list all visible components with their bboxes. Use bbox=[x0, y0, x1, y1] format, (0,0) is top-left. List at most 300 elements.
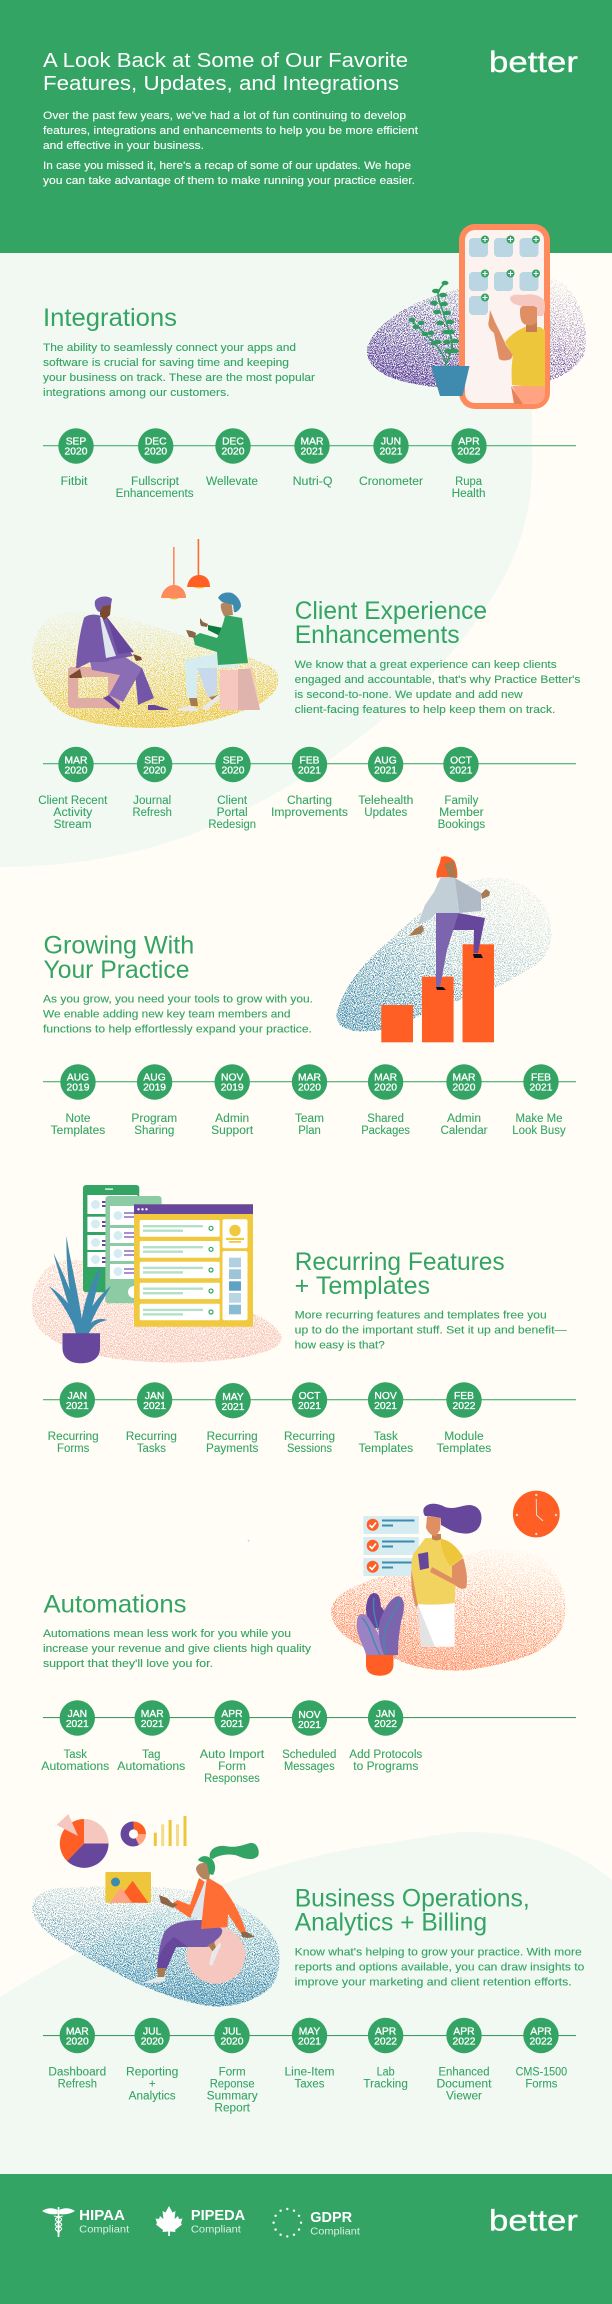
potted plant bbox=[49, 1236, 111, 1363]
body text: software is crucial for saving time and keeping bbox=[43, 357, 289, 369]
bars bbox=[381, 944, 494, 1042]
seated person right bbox=[178, 593, 260, 711]
milestone: Team Plan: Plan bbox=[298, 1125, 321, 1137]
panel: growing with your practice bbox=[43, 856, 576, 1137]
body text: support that they'll love you for. bbox=[43, 1658, 213, 1670]
milestone: Nutri-Q: Nutri-Q bbox=[293, 476, 333, 488]
pie chart bbox=[57, 1814, 109, 1868]
milestone: Client Recent Activity Stream: MAR bbox=[65, 755, 87, 766]
heading: Enhancements bbox=[295, 621, 460, 649]
milestone: Client Portal Redesign: SEP bbox=[223, 755, 243, 766]
milestone: Cronometer bbox=[359, 428, 423, 488]
illustration: app screens and plant bbox=[32, 1185, 282, 1363]
milestone: Tag Automations bbox=[117, 1700, 186, 1773]
milestone: Add Protocols to Programs: to Programs bbox=[353, 1761, 419, 1773]
milestone: Telehealth Updates: Telehealth bbox=[358, 795, 413, 807]
body text: how easy is that? bbox=[295, 1339, 385, 1351]
milestone: Recurring Tasks: 2021 bbox=[143, 1401, 166, 1412]
potted plant bbox=[357, 1593, 404, 1676]
milestone: Enhanced Document Viewer: APR bbox=[453, 2026, 475, 2037]
phone bbox=[459, 224, 550, 409]
intro text: you can take advantage of them to make running your practice easier. bbox=[43, 175, 415, 187]
milestone: Telehealth Updates: AUG bbox=[374, 755, 397, 766]
milestone: Line-Item Taxes: Taxes bbox=[294, 2078, 325, 2090]
intro text: In case you missed it, here's a recap of some of our updates. We hope bbox=[43, 160, 411, 172]
milestone: Team Plan: 2020 bbox=[298, 1083, 321, 1094]
heading: Integrations bbox=[43, 304, 177, 332]
HIPAA badge bbox=[42, 2207, 129, 2237]
milestone: Task Automations bbox=[41, 1700, 110, 1773]
icon: maple leaf bbox=[156, 2206, 182, 2236]
heading bbox=[295, 1885, 530, 1937]
milestone: Charting Improvements: Improvements bbox=[271, 807, 348, 819]
milestone: Admin Support bbox=[211, 1064, 254, 1137]
milestone: Client Portal Redesign: 2020 bbox=[222, 765, 245, 776]
milestone: Admin Support: Support bbox=[211, 1125, 254, 1137]
milestone: Lab Tracking: 2022 bbox=[374, 2036, 397, 2047]
milestone: Family Member Bookings: Family bbox=[444, 795, 479, 807]
body text: improve your marketing and client retention efforts. bbox=[295, 1977, 572, 1989]
logo: better bbox=[489, 46, 578, 79]
milestone: Wellevate: 2020 bbox=[222, 447, 245, 458]
milestone: Task Templates bbox=[358, 1382, 413, 1455]
milestone: Rupa Health: Rupa bbox=[455, 476, 483, 488]
milestone: Recurring Payments bbox=[206, 1383, 259, 1455]
heading: Client Experience bbox=[295, 597, 487, 625]
milestone: Task Templates: NOV bbox=[374, 1391, 397, 1402]
body text: up to do the important stuff. Set it up and benefit— bbox=[295, 1324, 567, 1336]
milestone: Tag Automations: MAR bbox=[141, 1709, 164, 1720]
milestone: Make Me Look Busy bbox=[512, 1064, 566, 1137]
milestone: Make Me Look Busy: FEB bbox=[531, 1073, 551, 1084]
milestone: Fullscript Enhancements: DEC bbox=[145, 437, 167, 448]
logo: better bbox=[489, 2205, 578, 2238]
milestone: Scheduled Messages: NOV bbox=[298, 1710, 321, 1721]
milestone: Form Reponse Summary Report: Report bbox=[214, 2102, 251, 2114]
milestone: Dashboard Refresh: Refresh bbox=[58, 2078, 97, 2090]
milestone: Team Plan: Team bbox=[295, 1113, 324, 1125]
milestone: Auto Import Form Responses: Responses bbox=[204, 1773, 260, 1785]
milestone: Lab Tracking: Lab bbox=[377, 2066, 395, 2078]
body text: engaged and accountable, that's why Practice Better's bbox=[295, 674, 581, 686]
milestone: Recurring Forms: 2021 bbox=[66, 1401, 89, 1412]
milestone: Cronometer: JUN bbox=[381, 437, 401, 448]
HIPAA badge: Compliant bbox=[79, 2224, 129, 2236]
milestone: Recurring Tasks bbox=[126, 1382, 177, 1455]
milestone: Journal Refresh: Journal bbox=[133, 795, 171, 807]
milestone: Client Portal Redesign: Redesign bbox=[208, 819, 256, 831]
milestone: Fitbit bbox=[58, 428, 94, 488]
intro text bbox=[43, 110, 418, 187]
milestone: Program Sharing: AUG bbox=[143, 1073, 166, 1084]
light green phone bbox=[105, 1196, 162, 1303]
heading: Analytics + Billing bbox=[295, 1909, 487, 1937]
milestone: CMS-1500 Forms: APR bbox=[530, 2026, 552, 2037]
milestone: Scheduled Messages bbox=[282, 1700, 336, 1773]
clock bbox=[513, 1491, 560, 1537]
heading: Automations bbox=[44, 1591, 186, 1619]
yellow app window bbox=[134, 1204, 253, 1327]
milestone: Wellevate bbox=[206, 428, 258, 488]
seated person left bbox=[68, 597, 168, 710]
body text: The ability to seamlessly connect your apps and bbox=[43, 342, 296, 354]
heading bbox=[295, 597, 487, 649]
title: A Look Back at Some of Our Favorite bbox=[43, 50, 408, 72]
stippled purple blob bbox=[367, 275, 586, 389]
milestone: Recurring Sessions: OCT bbox=[299, 1391, 321, 1402]
milestone: Make Me Look Busy: 2021 bbox=[530, 1083, 553, 1094]
milestone: Rupa Health: 2022 bbox=[458, 447, 481, 458]
body text: increase your revenue and give clients high quality bbox=[43, 1643, 312, 1655]
body text bbox=[295, 1309, 567, 1351]
milestone: Client Portal Redesign bbox=[208, 747, 256, 831]
milestone: Form Reponse Summary Report: JUL bbox=[223, 2026, 241, 2037]
milestone: Line-Item Taxes bbox=[284, 2018, 334, 2090]
milestone: Family Member Bookings bbox=[438, 747, 485, 831]
milestone: Reporting + Analytics bbox=[126, 2018, 178, 2102]
milestone: Family Member Bookings: 2021 bbox=[450, 765, 473, 776]
icon: ring of stars bbox=[272, 2208, 302, 2238]
milestone: Recurring Payments: MAY bbox=[222, 1392, 244, 1403]
milestone: Task Automations: Task bbox=[64, 1749, 87, 1761]
milestone: Cronometer: 2021 bbox=[380, 447, 403, 458]
milestone: Reporting + Analytics: + bbox=[149, 2078, 156, 2090]
milestone: Nutri-Q bbox=[293, 428, 333, 488]
PIPEDA badge: Compliant bbox=[191, 2224, 241, 2236]
milestone: Charting Improvements: Charting bbox=[287, 795, 332, 807]
milestone: Admin Calendar: Calendar bbox=[440, 1125, 488, 1137]
milestone: Shared Packages bbox=[361, 1064, 410, 1137]
milestone: Line-Item Taxes: Line-Item bbox=[284, 2066, 334, 2078]
title: Features, Updates, and Integrations bbox=[43, 73, 399, 95]
milestone: Tag Automations: 2021 bbox=[141, 1719, 164, 1730]
person climbing bbox=[409, 856, 490, 990]
body text bbox=[295, 1947, 584, 1989]
body text: As you grow, you need your tools to grow with you. bbox=[43, 993, 313, 1005]
illustration: phone and plant bbox=[367, 224, 586, 409]
GDPR badge: GDPR bbox=[310, 2210, 353, 2226]
timeline bbox=[43, 2018, 576, 2114]
body text bbox=[43, 993, 313, 1035]
seated woman bbox=[142, 1843, 259, 1983]
milestone: Recurring Sessions: 2021 bbox=[298, 1401, 321, 1412]
milestone: Admin Calendar: Admin bbox=[447, 1113, 481, 1125]
milestone: Task Templates: Task bbox=[374, 1431, 398, 1443]
milestone: Recurring Forms: Recurring bbox=[48, 1431, 99, 1443]
milestone: Recurring Sessions: Sessions bbox=[287, 1443, 332, 1455]
body text: We enable adding new key team members and bbox=[43, 1008, 290, 1020]
body text: We know that a great experience can keep clients bbox=[295, 659, 557, 671]
heading: + Templates bbox=[295, 1272, 430, 1300]
milestone: Module Templates: 2022 bbox=[453, 1401, 476, 1412]
milestone: Form Reponse Summary Report: Reponse bbox=[210, 2078, 255, 2090]
milestone: Form Reponse Summary Report bbox=[207, 2018, 258, 2114]
pink ball bbox=[187, 1926, 245, 1984]
milestone: Telehealth Updates bbox=[358, 747, 413, 819]
milestone: Client Recent Activity Stream bbox=[38, 747, 108, 831]
milestone: CMS-1500 Forms bbox=[516, 2018, 567, 2090]
title bbox=[43, 50, 408, 95]
milestone: Recurring Forms: JAN bbox=[68, 1391, 87, 1402]
milestone: Recurring Payments: 2021 bbox=[222, 1402, 245, 1413]
milestone: Rupa Health bbox=[451, 428, 487, 500]
illustration: woman with checklist and clock bbox=[248, 1491, 565, 1676]
panel: business operations bbox=[32, 1814, 584, 2114]
milestone: Line-Item Taxes: MAY bbox=[299, 2026, 320, 2037]
panel: automations bbox=[41, 1491, 576, 1785]
stippled pink blob bbox=[32, 1260, 282, 1362]
body text bbox=[295, 659, 581, 716]
GDPR badge bbox=[272, 2208, 360, 2238]
milestone: Dashboard Refresh bbox=[48, 2018, 106, 2090]
mint background shape: upper bbox=[0, 253, 532, 867]
milestone: Family Member Bookings: Bookings bbox=[438, 819, 485, 831]
milestone: Shared Packages: MAR bbox=[374, 1073, 397, 1084]
milestone: Program Sharing: Program bbox=[131, 1113, 177, 1125]
milestone: Scheduled Messages: Scheduled bbox=[282, 1749, 336, 1761]
milestone: Dashboard Refresh: 2020 bbox=[66, 2036, 89, 2047]
milestone: Module Templates: Templates bbox=[437, 1443, 492, 1455]
milestone: Form Reponse Summary Report: 2020 bbox=[221, 2036, 244, 2047]
milestone: Recurring Tasks: JAN bbox=[145, 1391, 164, 1402]
milestone: Auto Import Form Responses: 2021 bbox=[221, 1719, 244, 1730]
stray dot bbox=[248, 1540, 250, 1542]
milestone: Add Protocols to Programs: JAN bbox=[376, 1709, 395, 1720]
body text: reports and options available, you can draw insights to bbox=[295, 1962, 584, 1974]
milestone: Fitbit: 2020 bbox=[65, 447, 88, 458]
milestone: Recurring Forms: Forms bbox=[57, 1443, 90, 1455]
donut chart bbox=[121, 1821, 146, 1846]
woman bbox=[411, 1504, 482, 1647]
intro text: features, integrations and enhancements to help you be more efficient bbox=[43, 125, 418, 137]
milestone: Recurring Sessions bbox=[284, 1382, 335, 1455]
milestone: Enhanced Document Viewer bbox=[436, 2018, 492, 2102]
heading bbox=[44, 931, 194, 984]
HIPAA badge: HIPAA bbox=[79, 2208, 125, 2224]
milestone: Admin Support: Admin bbox=[215, 1113, 249, 1125]
panel: integrations bbox=[43, 224, 586, 500]
milestone: Recurring Tasks: Tasks bbox=[137, 1443, 166, 1455]
milestone: Tag Automations: Automations bbox=[117, 1761, 186, 1773]
stippled blue blob bbox=[336, 878, 552, 1031]
milestone: Telehealth Updates: 2021 bbox=[374, 765, 397, 776]
milestone: Form Reponse Summary Report: Summary bbox=[207, 2090, 258, 2102]
body text: Know what's helping to grow your practice. With more bbox=[295, 1947, 582, 1959]
milestone: Charting Improvements: FEB bbox=[299, 755, 320, 766]
milestone: Form Reponse Summary Report: Form bbox=[219, 2066, 246, 2078]
milestone: Shared Packages: Packages bbox=[361, 1125, 410, 1137]
stippled blue blob bbox=[32, 1886, 279, 2006]
milestone: Lab Tracking: Tracking bbox=[363, 2078, 408, 2090]
milestone: Enhanced Document Viewer: Enhanced bbox=[438, 2066, 490, 2078]
milestone: Auto Import Form Responses: APR bbox=[221, 1709, 243, 1720]
timeline bbox=[43, 428, 576, 500]
green phone bbox=[83, 1185, 139, 1292]
milestone: Program Sharing: 2019 bbox=[143, 1083, 166, 1094]
milestone: Program Sharing: Sharing bbox=[134, 1125, 174, 1137]
milestone: Recurring Tasks: Recurring bbox=[126, 1431, 177, 1443]
intro text: and effective in your business. bbox=[43, 140, 204, 152]
GDPR badge: Compliant bbox=[310, 2225, 360, 2237]
picture card bbox=[105, 1872, 151, 1903]
body text: integrations among our customers. bbox=[43, 387, 230, 399]
icon: caduceus bbox=[42, 2207, 75, 2237]
milestone: Fitbit: SEP bbox=[66, 437, 86, 448]
milestone: Add Protocols to Programs bbox=[349, 1700, 423, 1773]
milestone: Recurring Payments: Recurring bbox=[207, 1431, 258, 1443]
milestone: Wellevate: DEC bbox=[222, 437, 244, 448]
milestone: Admin Support: NOV bbox=[221, 1073, 243, 1084]
milestone: Task Templates: 2021 bbox=[374, 1401, 397, 1412]
milestone: Team Plan: MAR bbox=[298, 1073, 321, 1084]
milestone: Lab Tracking bbox=[363, 2018, 408, 2090]
milestone: Fitbit: Fitbit bbox=[60, 476, 88, 488]
milestone: Make Me Look Busy: Make Me bbox=[516, 1113, 562, 1125]
milestone: Family Member Bookings: OCT bbox=[450, 755, 473, 766]
milestone: CMS-1500 Forms: Forms bbox=[525, 2078, 558, 2090]
milestone: Note Templates: AUG bbox=[67, 1073, 89, 1084]
milestone: Client Recent Activity Stream: Client Recent bbox=[38, 795, 108, 807]
heading: Business Operations, bbox=[295, 1885, 530, 1913]
milestone: Lab Tracking: APR bbox=[375, 2026, 396, 2037]
illustration: woman with charts bbox=[32, 1814, 279, 2006]
milestone: Admin Support: 2019 bbox=[221, 1083, 244, 1094]
milestone: Telehealth Updates: Updates bbox=[364, 807, 408, 819]
milestone: Admin Calendar: MAR bbox=[453, 1073, 475, 1084]
header band bbox=[0, 0, 612, 253]
body text: More recurring features and templates free you bbox=[295, 1309, 547, 1321]
milestone: Reporting + Analytics: Reporting bbox=[126, 2066, 178, 2078]
PIPEDA badge bbox=[156, 2206, 246, 2236]
milestone: Charting Improvements: 2021 bbox=[298, 765, 321, 776]
panel: client experience bbox=[32, 539, 581, 831]
milestone: Rupa Health: Health bbox=[452, 488, 486, 500]
milestone: Rupa Health: APR bbox=[458, 437, 480, 448]
milestone: Shared Packages: Shared bbox=[367, 1113, 404, 1125]
milestone: Client Recent Activity Stream: Stream bbox=[54, 819, 92, 831]
milestone: Client Portal Redesign: Portal bbox=[217, 807, 248, 819]
illustration: climbing bars bbox=[336, 856, 552, 1042]
milestone: Journal Refresh: SEP bbox=[144, 755, 165, 766]
milestone: Nutri-Q: MAR bbox=[301, 437, 323, 448]
checklist cards bbox=[363, 1516, 419, 1576]
heading: Growing With bbox=[44, 931, 194, 959]
milestone: Journal Refresh: Refresh bbox=[132, 807, 172, 819]
milestone: Module Templates: FEB bbox=[454, 1391, 474, 1402]
milestone: Add Protocols to Programs: Add Protocols bbox=[349, 1749, 423, 1761]
milestone: Admin Calendar: 2020 bbox=[453, 1083, 476, 1094]
milestone: Scheduled Messages: 2021 bbox=[298, 1720, 321, 1731]
milestone: CMS-1500 Forms: CMS-1500 bbox=[516, 2066, 567, 2078]
milestone: Scheduled Messages: Messages bbox=[284, 1761, 335, 1773]
milestone: Note Templates bbox=[51, 1064, 106, 1137]
body text bbox=[43, 342, 315, 399]
milestone: Note Templates: Note bbox=[66, 1113, 90, 1125]
milestone: Enhanced Document Viewer: 2022 bbox=[453, 2036, 476, 2047]
body text: is second-to-none. We update and add new bbox=[295, 689, 523, 701]
body text: Automations mean less work for you while you bbox=[43, 1628, 291, 1640]
stippled yellow blob bbox=[32, 612, 279, 728]
milestone: Task Templates: Templates bbox=[358, 1443, 413, 1455]
milestone: CMS-1500 Forms: 2022 bbox=[530, 2036, 553, 2047]
milestone: Fullscript Enhancements: Fullscript bbox=[131, 476, 180, 488]
milestone: Fullscript Enhancements: 2020 bbox=[144, 447, 167, 458]
milestone: Add Protocols to Programs: 2022 bbox=[374, 1719, 397, 1730]
milestone: Fullscript Enhancements bbox=[116, 428, 194, 500]
milestone: Tag Automations: Tag bbox=[142, 1749, 160, 1761]
mint background shape: lower bbox=[0, 1832, 612, 2174]
body text: client-facing features to help keep them on track. bbox=[295, 704, 555, 716]
milestone: Task Automations: Automations bbox=[41, 1761, 110, 1773]
milestone: Admin Calendar bbox=[440, 1064, 488, 1137]
milestone: Enhanced Document Viewer: Document bbox=[436, 2078, 492, 2090]
milestone: Task Automations: 2021 bbox=[66, 1719, 89, 1730]
stippled orange blob bbox=[331, 1549, 565, 1671]
milestone: Note Templates: 2019 bbox=[67, 1083, 90, 1094]
footer band bbox=[0, 2174, 612, 2304]
milestone: Note Templates: Templates bbox=[51, 1125, 106, 1137]
milestone: Module Templates bbox=[437, 1382, 492, 1455]
body text: your business on track. These are the most popular bbox=[43, 372, 315, 384]
milestone: Make Me Look Busy: Look Busy bbox=[512, 1125, 566, 1137]
timeline bbox=[38, 747, 576, 831]
heading: Recurring Features bbox=[295, 1248, 505, 1276]
milestone: Client Recent Activity Stream: 2020 bbox=[65, 765, 88, 776]
milestone: Wellevate: Wellevate bbox=[206, 476, 258, 488]
milestone: Line-Item Taxes: 2021 bbox=[298, 2036, 321, 2047]
milestone: Shared Packages: 2020 bbox=[374, 1083, 397, 1094]
milestone: Fullscript Enhancements: Enhancements bbox=[116, 488, 194, 500]
milestone: Charting Improvements bbox=[271, 747, 348, 819]
plant bbox=[408, 281, 470, 396]
milestone: Journal Refresh bbox=[132, 747, 172, 819]
milestone: Recurring Payments: Payments bbox=[206, 1443, 259, 1455]
milestone: Reporting + Analytics: JUL bbox=[143, 2026, 162, 2037]
milestone: Enhanced Document Viewer: Viewer bbox=[446, 2090, 482, 2102]
bar chart bbox=[154, 1816, 186, 1846]
timeline bbox=[41, 1700, 576, 1785]
lamps bbox=[161, 539, 210, 600]
milestone: Program Sharing bbox=[131, 1064, 177, 1137]
milestone: Dashboard Refresh: Dashboard bbox=[48, 2066, 106, 2078]
milestone: Reporting + Analytics: 2020 bbox=[141, 2036, 164, 2047]
milestone: Dashboard Refresh: MAR bbox=[66, 2026, 89, 2037]
milestone: Family Member Bookings: Member bbox=[439, 807, 484, 819]
intro text: Over the past few years, we've had a lot of fun continuing to develop bbox=[43, 110, 406, 122]
timeline bbox=[43, 1064, 576, 1137]
timeline bbox=[43, 1382, 576, 1455]
milestone: Auto Import Form Responses: Form bbox=[218, 1761, 246, 1773]
heading bbox=[295, 1248, 505, 1300]
milestone: Auto Import Form Responses: Auto Import bbox=[200, 1749, 265, 1761]
milestone: Nutri-Q: 2021 bbox=[301, 447, 324, 458]
milestone: Recurring Forms bbox=[48, 1382, 99, 1455]
illustration: two people talking bbox=[32, 539, 279, 728]
PIPEDA badge: PIPEDA bbox=[191, 2208, 246, 2224]
milestone: Client Recent Activity Stream: Activity bbox=[53, 807, 93, 819]
body text: functions to help effortlessly expand your practice. bbox=[43, 1023, 312, 1035]
milestone: Journal Refresh: 2020 bbox=[143, 765, 166, 776]
milestone: Module Templates: Module bbox=[444, 1431, 484, 1443]
panel: recurring features bbox=[32, 1185, 576, 1455]
milestone: Cronometer: Cronometer bbox=[359, 476, 423, 488]
milestone: Client Portal Redesign: Client bbox=[217, 795, 248, 807]
milestone: Auto Import Form Responses bbox=[200, 1700, 265, 1785]
body text bbox=[43, 1628, 312, 1670]
milestone: Team Plan bbox=[292, 1064, 327, 1137]
person at phone bbox=[488, 294, 546, 404]
milestone: Recurring Sessions: Recurring bbox=[284, 1431, 335, 1443]
